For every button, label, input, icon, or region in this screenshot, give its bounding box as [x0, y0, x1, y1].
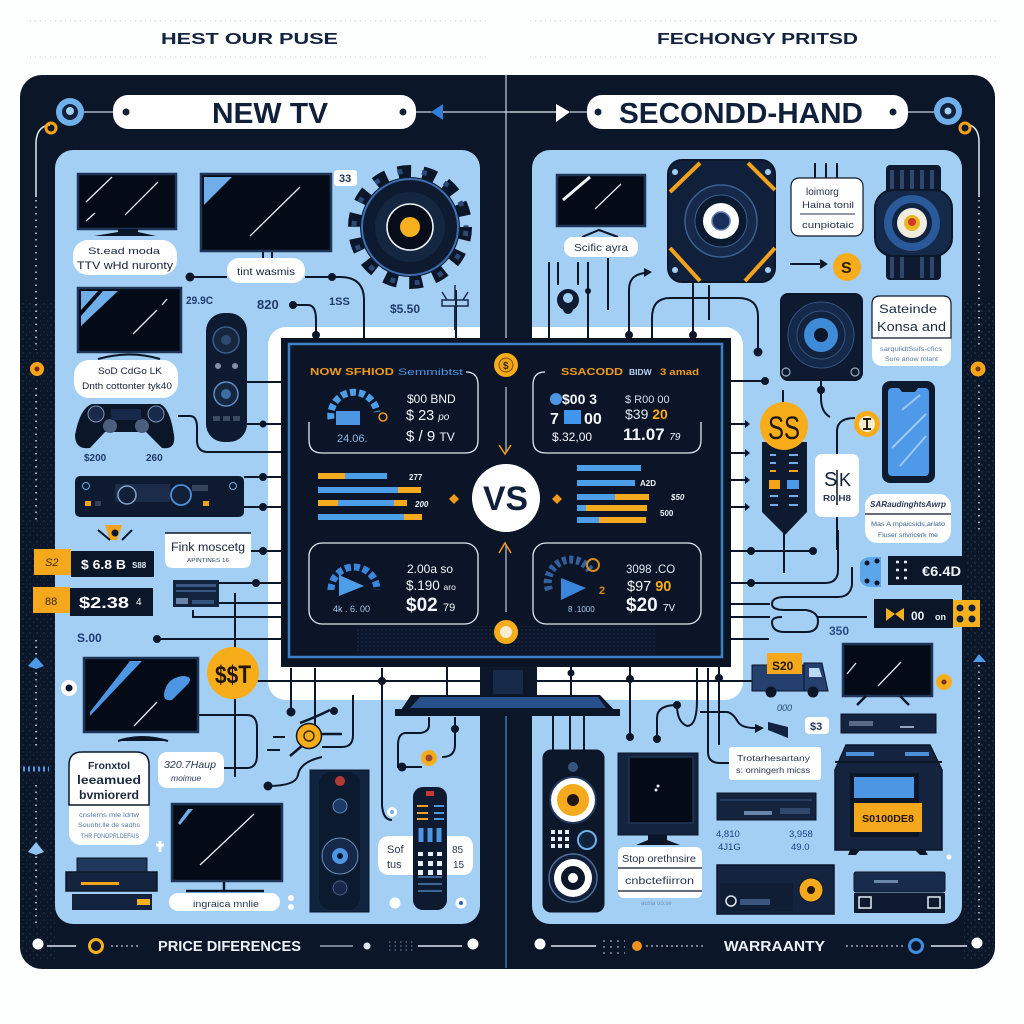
- icon: delivery truck: [752, 653, 828, 713]
- speech bubble: TV 1: TTV wHd nuronty: [77, 260, 174, 272]
- text card: Fronxtol: cnslerns mle ldrtw: [79, 813, 140, 819]
- coin: dollar: [207, 647, 259, 699]
- icon: small knob: [557, 289, 579, 314]
- stat panel: second-hand top: 7: [550, 411, 559, 428]
- price label: S 6.8: S2: [45, 557, 58, 569]
- monitor heading: second-hand: SSACODD: [561, 366, 623, 378]
- icon: small switch box: [173, 580, 219, 607]
- TV 3: [78, 288, 181, 359]
- price label: $2.38: 4: [136, 597, 142, 608]
- stat panel: second-hand bottom: $97 90: [627, 579, 671, 595]
- monitor heading: new: Semmibtst: [398, 367, 464, 378]
- connector lines: [157, 258, 867, 820]
- side tags: long remote: 85: [452, 845, 464, 856]
- small label: S.00: S.00: [77, 631, 102, 645]
- bars: new: 277: [409, 473, 423, 482]
- banner: second-hand: [510, 95, 962, 130]
- speech bubble: TV 2: [227, 258, 305, 283]
- icon: device stack: [66, 858, 157, 910]
- text box: Stop orethnsire: ausia uo.se: [641, 901, 672, 907]
- icon: media player: [717, 865, 834, 914]
- stat panel: second-hand top: $00 3: [562, 391, 597, 407]
- top heading: right: [530, 21, 1000, 57]
- small price labels upper left: 820: [257, 297, 279, 312]
- bars: second-hand: 500: [660, 509, 674, 518]
- stat panel: new top: [309, 372, 478, 453]
- panel: second-hand background: [532, 150, 962, 924]
- text card: 320.7 Haup: [158, 752, 224, 788]
- text box: Stop orethnsire: Stop orethnsire: [622, 853, 696, 865]
- small number labels: 49.0: [791, 842, 810, 853]
- speech bubble: TV 1: St.ead moda: [88, 246, 161, 257]
- stat panel: new top: $ / 9 TV: [406, 428, 455, 445]
- price label: $2.38: $2.38: [79, 595, 129, 612]
- text card: Fronxtol: bvmiorerd: [79, 790, 139, 802]
- stat panel: second-hand bottom: 3098 .CO: [626, 564, 675, 576]
- stat panel: second-hand top: 11.07 79: [623, 425, 681, 444]
- stat panel: new top: $00 BND: [407, 392, 456, 406]
- central monitor: [281, 338, 731, 667]
- white monitor halo: [268, 327, 743, 700]
- icon: delivery truck: S20: [772, 659, 794, 673]
- card: S K: R0 H8: [823, 493, 851, 503]
- monitor heading: new: NOW SFHIOD: [310, 366, 395, 378]
- icon: blue connector: [860, 557, 881, 587]
- icon: desktop monitor: [618, 753, 698, 845]
- centre divider: [480, 75, 532, 968]
- TV 5: [172, 804, 282, 891]
- footer: price differences: [32, 938, 478, 955]
- text box: loimorg: loimorg: [806, 187, 839, 198]
- text box: SARaudinght: Mas A mpaicsids,arlato: [871, 521, 945, 528]
- price label: S 6.8: [34, 549, 154, 577]
- footer: warranty: [534, 938, 982, 955]
- coin: small key: [854, 411, 880, 437]
- text box: Trotarhesartany: [729, 747, 821, 780]
- small price labels upper left: 1SS: [329, 296, 350, 308]
- icon: speaker box: [781, 294, 862, 380]
- stat panel: new bottom: 2.00a so: [407, 562, 453, 576]
- price label: €6.40: €6.4D: [922, 564, 961, 579]
- small dots near remote: [156, 750, 466, 910]
- stat panel: second-hand top: [533, 372, 701, 453]
- stat panel: second-hand top: $.32,00: [552, 430, 592, 444]
- icon: disc player: [854, 872, 945, 913]
- coin: S with arrow: S: [841, 260, 852, 277]
- text card: 320.7 Haup: moimue: [171, 773, 202, 783]
- stat panel: new top: 24.06.: [337, 433, 368, 445]
- small label: 350: 350: [829, 624, 849, 638]
- text card: Fronxtol: Fronxtol: [88, 760, 130, 772]
- TV 4: [61, 658, 198, 741]
- text card: Fronxtol: THR FONOPRLDEFAIS: [81, 834, 139, 840]
- stat panel: second-hand top: $ R00 00: [625, 394, 670, 406]
- TV 6: [557, 175, 645, 237]
- small price labels upper left: $5.50: [390, 302, 420, 316]
- text box: Trotarhesartany: Trotarhesartany: [737, 753, 811, 763]
- stat panel: new bottom: [309, 543, 478, 624]
- icon: game controller: [75, 404, 174, 448]
- caption: TV 5: ingraica mnlie: [193, 899, 259, 910]
- card: S K: [815, 454, 859, 517]
- VS badge: VS: [483, 480, 528, 518]
- banner: second-hand: SECONDD-HAND: [619, 98, 863, 130]
- text card: fink moscetg: [165, 533, 251, 568]
- stat panel: second-hand top: 00: [584, 411, 602, 428]
- icon: set-top box: [717, 793, 816, 820]
- price label: $2.38: 88: [45, 596, 57, 608]
- icon: oven-style TV: [835, 745, 952, 860]
- monitor heading: second-hand: [561, 366, 699, 378]
- side tags: long remote: Sof: [387, 844, 404, 856]
- text box: Sateinde: Sateinde: [879, 304, 937, 316]
- small number labels: 4J1G: [718, 842, 741, 853]
- text box: loimorg: cunpiotaic: [802, 220, 854, 231]
- stat panel: second-hand bottom: $20 7V: [626, 595, 676, 616]
- price label: 00 on: [874, 599, 980, 628]
- stat panel: new top: $ 23 po: [406, 408, 450, 424]
- side tags: long remote: [378, 836, 473, 875]
- price label: 00 on: 00: [911, 609, 925, 623]
- price badge: 33: 33: [339, 173, 351, 185]
- icon: delivery truck: 000: [777, 703, 792, 713]
- icon: orange beacon: [98, 525, 132, 540]
- text card: Fronxtol: leeamued: [77, 775, 141, 787]
- side tags: long remote: 15: [453, 860, 465, 871]
- monitor heading: new: [310, 366, 464, 378]
- text box: SARaudinght: Fiuser srivricerk me: [878, 532, 938, 539]
- icon: remote control: [206, 313, 247, 442]
- price badge: 33: [334, 170, 357, 186]
- speech bubble: TV 3: Dnth cottonter tyk40: [82, 381, 172, 392]
- small price labels upper left: 29.9C: [186, 295, 213, 307]
- footer: price differences: PRICE DIFERENCES: [158, 939, 301, 955]
- small price labels upper left: [84, 295, 420, 464]
- speech bubble: TV 2: tint wasmis: [237, 267, 295, 278]
- bars: new: 200: [414, 500, 429, 509]
- card: S K: S: [824, 469, 837, 491]
- icon: gear speaker: [354, 171, 466, 283]
- text card: fink moscetg: Fink moscetg: [171, 542, 245, 554]
- icon: black remote: [762, 442, 807, 535]
- price badge: $3: [805, 717, 829, 734]
- speech bubble: TV 1: [73, 240, 177, 275]
- bars: second-hand: $50: [670, 493, 685, 502]
- monitor heading: second-hand: BIDW: [629, 367, 653, 377]
- node: orange hub: [267, 707, 342, 756]
- price badge: $3: $3: [810, 721, 822, 733]
- connector nodes: [153, 268, 825, 790]
- text box: Sateinde: [872, 296, 951, 366]
- text card: Fronxtol: [69, 752, 149, 845]
- price label: $2.38: [33, 587, 153, 616]
- arrows and coins: [449, 353, 562, 644]
- text box: Stop orethnsire: [618, 847, 702, 907]
- banner: new TV: NEW TV: [212, 98, 329, 130]
- small price labels upper left: $200: [84, 453, 107, 464]
- icon: camera device: [875, 165, 952, 280]
- icon: receiver: [75, 476, 244, 517]
- panel: new TV background: [55, 150, 480, 924]
- card: S K: K: [839, 470, 851, 490]
- speech bubble: TV 6: Scific ayra: [574, 243, 629, 254]
- small price labels upper left: 260: [146, 453, 163, 464]
- arrows and coins: $: [503, 361, 509, 372]
- icon: oven-style TV: S0100DE8: [862, 813, 914, 825]
- bars: second-hand: A2D: [640, 479, 656, 488]
- small number labels: 4,810: [716, 829, 740, 840]
- text box: Sateinde: Konsa and: [877, 320, 946, 334]
- icon: small lamp: [442, 285, 468, 330]
- TV 7: [843, 644, 952, 705]
- small number labels: 3,958: [789, 829, 813, 840]
- price label: S 6.8: S88: [132, 561, 147, 570]
- text box: SARaudinght: [865, 494, 951, 543]
- text card: fink moscetg: APINTINES 16: [187, 558, 229, 564]
- text box: Sateinde: Sure anow rnlant: [885, 357, 938, 363]
- side tags: long remote: tus: [387, 859, 402, 871]
- small number labels: [716, 829, 813, 853]
- stat panel: new bottom: $.190 aro: [406, 578, 456, 593]
- TV 1: [78, 174, 176, 236]
- stat panel: second-hand bottom: 8 .1000: [568, 605, 595, 614]
- caption: TV 5: [169, 893, 280, 911]
- footer: warranty: WARRAANTY: [724, 939, 825, 955]
- coin: SS: SS: [768, 410, 800, 446]
- text box: SARaudinght: SARaudinghtsAwrp: [870, 500, 946, 509]
- bars: second-hand: [577, 465, 685, 523]
- icon: slim device: [841, 714, 936, 733]
- speech bubble: TV 3: [74, 360, 178, 398]
- VS badge: [472, 464, 540, 532]
- top heading: right: FECHONGY PRITSD: [657, 31, 858, 48]
- icon: tall speaker: [310, 770, 369, 912]
- side rail details: [23, 123, 986, 925]
- stat panel: new bottom: $02 79: [406, 595, 455, 616]
- stat panel: second-hand top: $39 20: [625, 406, 668, 422]
- top heading: left: HEST OUR PUSE: [161, 31, 338, 48]
- price label: S 6.8: $ 6.8 B: [81, 557, 126, 572]
- icon: floor speaker: [543, 750, 604, 912]
- bars: new: [318, 473, 429, 520]
- banner: new TV: [56, 95, 510, 130]
- text card: Fronxtol: Sounbr.lle de sadhs: [78, 823, 140, 829]
- speech bubble: TV 3: SoD CdGo LK: [98, 366, 163, 377]
- price label: €6.40: [888, 556, 967, 585]
- text box: loimorg: Haina tonil: [802, 200, 854, 211]
- stat panel: new bottom: 4k . 6. 00: [333, 604, 370, 614]
- text box: Stop orethnsire: cnbctefiirron: [625, 875, 694, 887]
- icon: long remote: [413, 787, 447, 910]
- text box: loimorg: [791, 163, 863, 236]
- icon: smartphone: [882, 381, 935, 483]
- text box: Sateinde: sarqulidtSsifs-cfics: [880, 347, 942, 353]
- small dark remote stub: [768, 722, 788, 738]
- coin: S with arrow: [790, 253, 861, 281]
- monitor heading: second-hand: 3 amad: [660, 367, 699, 378]
- TV 2: [201, 174, 331, 264]
- coin: dollar: $$T: [215, 661, 251, 689]
- text card: 320.7 Haup: 320.7Haup: [164, 759, 216, 771]
- price label: 00 on: on: [935, 612, 946, 622]
- icon: square speaker: [668, 160, 775, 282]
- coin: SS: [760, 402, 808, 450]
- text box: Trotarhesartany: s: orningerh micss: [736, 765, 810, 775]
- top heading: left: [30, 21, 490, 57]
- speech bubble: TV 6: [564, 237, 638, 257]
- stat panel: second-hand bottom: [533, 543, 701, 624]
- monitor stand: [395, 667, 620, 716]
- stat panel: second-hand bottom: 2: [599, 585, 605, 597]
